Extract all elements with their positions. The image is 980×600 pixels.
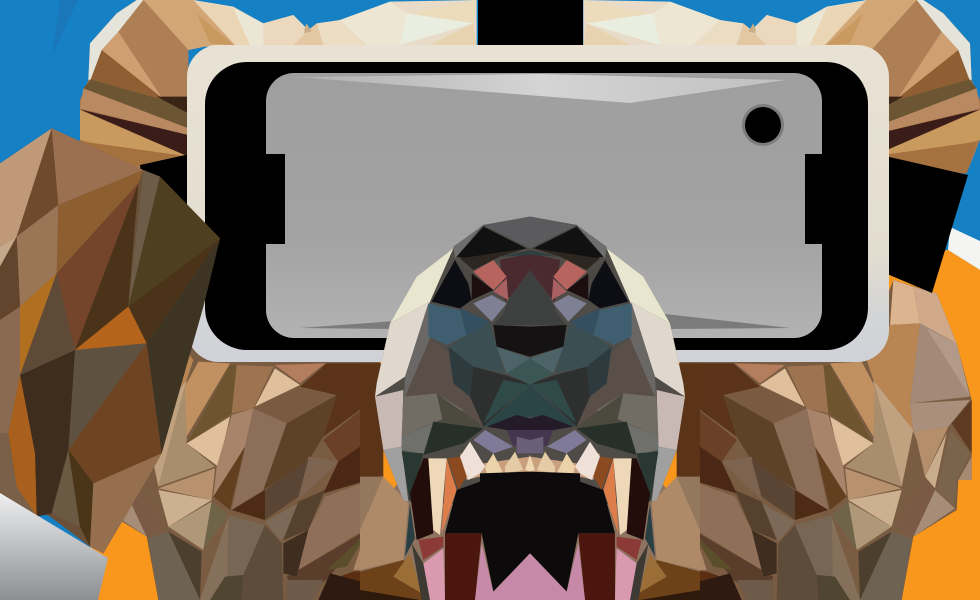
background: white stripe [948,227,980,270]
headset inner frame [205,62,868,350]
tongue and gums [445,533,482,600]
VR headset [187,45,889,362]
upper gum [460,453,530,480]
background: blue streak [52,0,78,56]
side of mouth [402,452,423,503]
background: orange area [90,250,980,600]
bear snout: right half (mirror) [530,217,700,600]
screen lower shade right [665,314,790,329]
screen glare [297,74,785,103]
grey slab, bottom left [0,493,108,600]
right cheek fur [680,280,972,600]
left fang [428,458,447,535]
right ear and crown [583,0,980,173]
left incisor [460,442,485,480]
front teeth [485,453,503,473]
headset shell [187,45,889,362]
screen lower shade left [300,321,395,329]
bear head fur: right half [583,0,980,600]
right headset strap [885,156,968,293]
bear snout: left half [360,217,530,600]
phone screen [266,73,822,338]
mouth interior [445,472,530,592]
top headset strap [478,0,583,46]
left headset strap [140,154,190,250]
bear paw [0,128,220,553]
camera lens [742,104,784,146]
bear head fur: left half (mirror) [80,0,477,600]
